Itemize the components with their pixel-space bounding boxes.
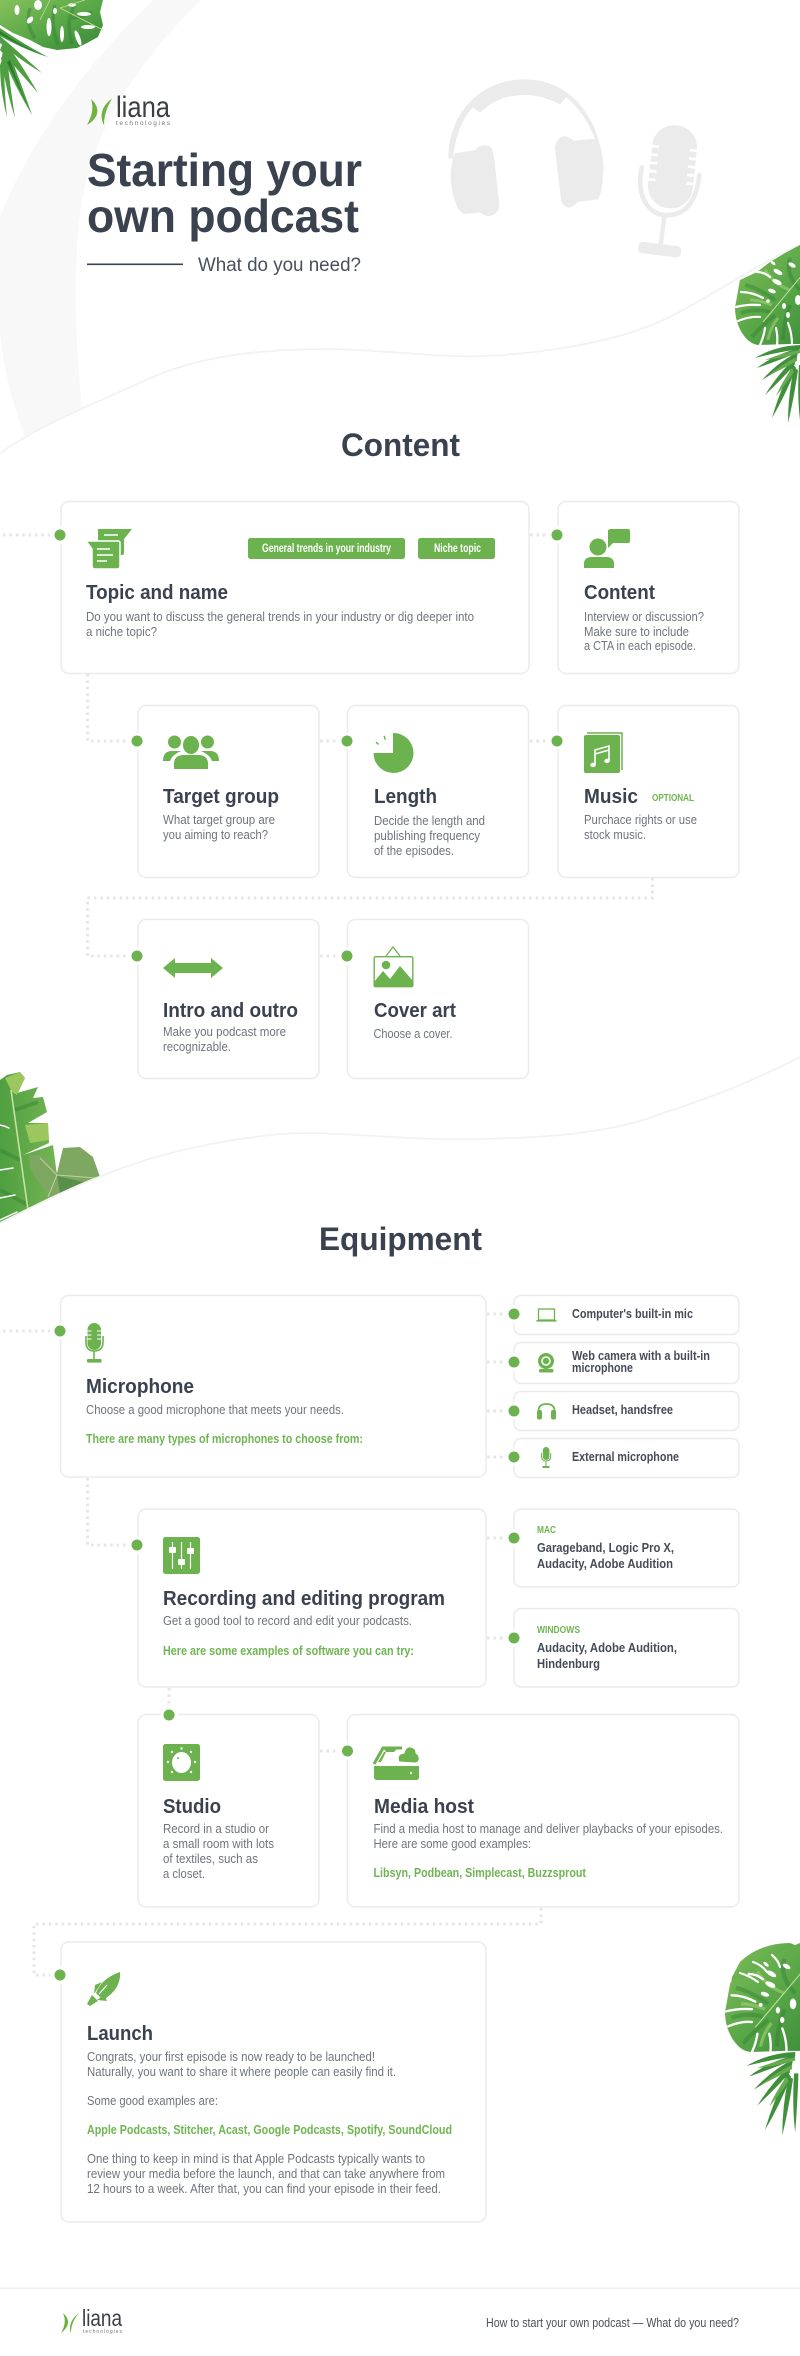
- label: mac: MAC: [537, 1525, 556, 1536]
- icon: group of people: [163, 736, 219, 769]
- icon: music album: [584, 733, 622, 773]
- option: external microphone: [514, 1438, 739, 1478]
- description: [163, 812, 275, 842]
- icon: mixer sliders: [163, 1537, 200, 1574]
- background: second wave line: [0, 1056, 800, 1224]
- description: Do you want to discuss the general trends in your industry or dig deeper into: [86, 609, 474, 624]
- subtitle with rule: What do you need?: [198, 255, 361, 276]
- option: computer's built-in mic: [514, 1296, 739, 1334]
- background: area under second wave: [0, 1056, 800, 1300]
- description: you aiming to reach?: [163, 827, 268, 842]
- software list: [537, 1541, 674, 1571]
- description: Here are some good examples:: [374, 1836, 531, 1851]
- description: a niche topic?: [86, 624, 157, 639]
- software list: Audacity, Adobe Audition: [537, 1557, 673, 1571]
- logo: liana technologies: technologies: [116, 120, 171, 127]
- software list: Audacity, Adobe Audition,: [537, 1641, 677, 1655]
- description: Choose a cover.: [374, 1026, 452, 1041]
- panel: microphone: [60, 1296, 486, 1477]
- title: Starting your: [87, 144, 362, 196]
- heading: microphone: Microphone: [86, 1376, 194, 1398]
- description: Interview or discussion?: [584, 609, 704, 624]
- leaves: lower right: [725, 1931, 800, 2135]
- description: [374, 813, 485, 858]
- description: a small room with lots: [163, 1836, 274, 1851]
- panel: launch: [61, 1942, 486, 2222]
- note text: 12 hours to a week. After that, you can find your episode in their feed.: [87, 2181, 441, 2196]
- software list: Hindenburg: [537, 1657, 600, 1671]
- intro text: Congrats, your first episode is now ready to be launched!: [87, 2049, 375, 2064]
- tag: general trends: [248, 538, 405, 559]
- heading: intro and outro: Intro and outro: [163, 1000, 298, 1022]
- panel: recording and editing program: [138, 1509, 486, 1687]
- icon: headphones watermark: [448, 79, 604, 216]
- heading: topic and name: Topic and name: [86, 582, 228, 604]
- intro text: Some good examples are:: [87, 2093, 218, 2108]
- description: Get a good tool to record and edit your podcasts.: [163, 1613, 412, 1628]
- panel: music: [558, 706, 739, 878]
- title: own podcast: [87, 190, 359, 242]
- heading: recording and editing program: Recording and editing program: [163, 1588, 445, 1610]
- description: Find a media host to manage and deliver playbacks of your episodes.: [374, 1821, 723, 1836]
- heading: music: Music: [584, 786, 638, 808]
- panel: media host: [348, 1714, 739, 1907]
- description: Make sure to include: [584, 624, 689, 639]
- description: [163, 1024, 286, 1054]
- note text: One thing to keep in mind is that Apple Podcasts typically wants to: [87, 2151, 425, 2166]
- description: recognizable.: [163, 1039, 231, 1054]
- heading: length: Length: [374, 786, 437, 808]
- leaves: lower left corner: [0, 1072, 100, 1230]
- icon: person with speech bubble: [584, 529, 630, 568]
- panel: intro and outro: [138, 920, 319, 1078]
- description: What target group are: [163, 812, 275, 827]
- label: External microphone: [572, 1450, 679, 1464]
- icon: rocket: [87, 1972, 120, 2006]
- panel: length: [348, 706, 528, 878]
- intro text: [87, 2049, 396, 2108]
- panel: content: [558, 502, 739, 674]
- panel: target group: [138, 706, 319, 878]
- icon: framed picture: [374, 947, 413, 987]
- logo: liana technologies: liana: [116, 91, 170, 124]
- icon: microphone watermark: [638, 123, 701, 258]
- leaves: top left corner: [0, 0, 103, 118]
- icon: double arrow: [163, 958, 223, 978]
- description: Record in a studio or: [163, 1821, 270, 1836]
- green examples: Apple Podcasts, Stitcher, Acast, Google Podcasts, Spotify, SoundCloud: [87, 2123, 452, 2137]
- label: windows: WINDOWS: [537, 1625, 580, 1636]
- description: [86, 609, 474, 639]
- description: of the episodes.: [374, 843, 454, 858]
- note text: [87, 2151, 445, 2196]
- icon: pie timer: [374, 733, 414, 773]
- description: [584, 812, 697, 842]
- description: Decide the length and: [374, 813, 485, 828]
- heading: Content: Content: [341, 427, 460, 463]
- panel: topic and name: [61, 502, 529, 674]
- icon: speech documents: [86, 529, 132, 569]
- tag: optional: OPTIONAL: [652, 793, 694, 804]
- description: stock music.: [584, 827, 646, 842]
- description: a closet.: [163, 1866, 205, 1881]
- background: curved band: [0, 0, 201, 437]
- heading: media host: Media host: [374, 1796, 474, 1818]
- icon: cloud server: [374, 1747, 419, 1780]
- green note: Here are some examples of software you can try:: [163, 1644, 414, 1658]
- tag: niche topic: Niche topic: [434, 543, 481, 555]
- green note: There are many types of microphones to choose from:: [86, 1432, 363, 1446]
- icon: webcam: [538, 1353, 554, 1372]
- software: mac: [514, 1509, 739, 1587]
- icon: external microphone: [542, 1447, 551, 1468]
- label: Headset, handsfree: [572, 1403, 673, 1417]
- background: area under first wave: [0, 244, 800, 500]
- tag: niche topic: [418, 538, 495, 559]
- note text: review your media before the launch, and that can take anywhere from: [87, 2166, 445, 2181]
- description: [374, 1821, 723, 1851]
- title: [87, 144, 362, 242]
- software list: Garageband, Logic Pro X,: [537, 1541, 674, 1555]
- icon: microphone: [86, 1323, 103, 1363]
- intro text: Naturally, you want to share it where people can easily find it.: [87, 2064, 396, 2079]
- description: a CTA in each episode.: [584, 638, 696, 653]
- connectors: dotted lines and nodes: [3, 526, 652, 1984]
- heading: target group: Target group: [163, 786, 279, 808]
- heading: Equipment: Equipment: [319, 1221, 482, 1257]
- heading: cover art: Cover art: [374, 1000, 456, 1022]
- panel: cover art: [348, 920, 528, 1078]
- footer logo: liana: [82, 2305, 122, 2331]
- panel: studio: [138, 1714, 319, 1907]
- green examples: Libsyn, Podbean, Simplecast, Buzzsprout: [374, 1866, 587, 1880]
- description: [163, 1821, 274, 1881]
- label: [572, 1349, 710, 1375]
- tag: general trends: General trends in your industry: [262, 543, 391, 555]
- monstera leaf: upper right: [735, 232, 800, 423]
- footer logo: [61, 2305, 122, 2335]
- description: [584, 609, 704, 653]
- heading: studio: Studio: [163, 1796, 221, 1818]
- description: Purchace rights or use: [584, 812, 697, 827]
- icon: laptop: [536, 1309, 556, 1322]
- footer: [0, 2288, 800, 2335]
- software list: [537, 1641, 677, 1671]
- label: Computer's built-in mic: [572, 1307, 693, 1321]
- description: Choose a good microphone that meets your needs.: [86, 1402, 344, 1417]
- software: windows: [514, 1608, 739, 1687]
- option: headset: [514, 1392, 739, 1430]
- heading: content: Content: [584, 582, 655, 604]
- heading: launch: Launch: [87, 2023, 153, 2045]
- footer logo: technologies: [83, 2329, 122, 2335]
- footer text: How to start your own podcast — What do you need?: [486, 2315, 739, 2330]
- option: web camera: [514, 1342, 739, 1384]
- icon: headset: [537, 1404, 556, 1420]
- label: microphone: [572, 1361, 633, 1375]
- label: Web camera with a built-in: [572, 1349, 710, 1363]
- description: of textiles, such as: [163, 1851, 258, 1866]
- logo: liana technologies: [87, 91, 171, 127]
- background: first wave line: [0, 244, 800, 455]
- icon: studio dial: [163, 1744, 200, 1781]
- description: Make you podcast more: [163, 1024, 286, 1039]
- description: publishing frequency: [374, 828, 480, 843]
